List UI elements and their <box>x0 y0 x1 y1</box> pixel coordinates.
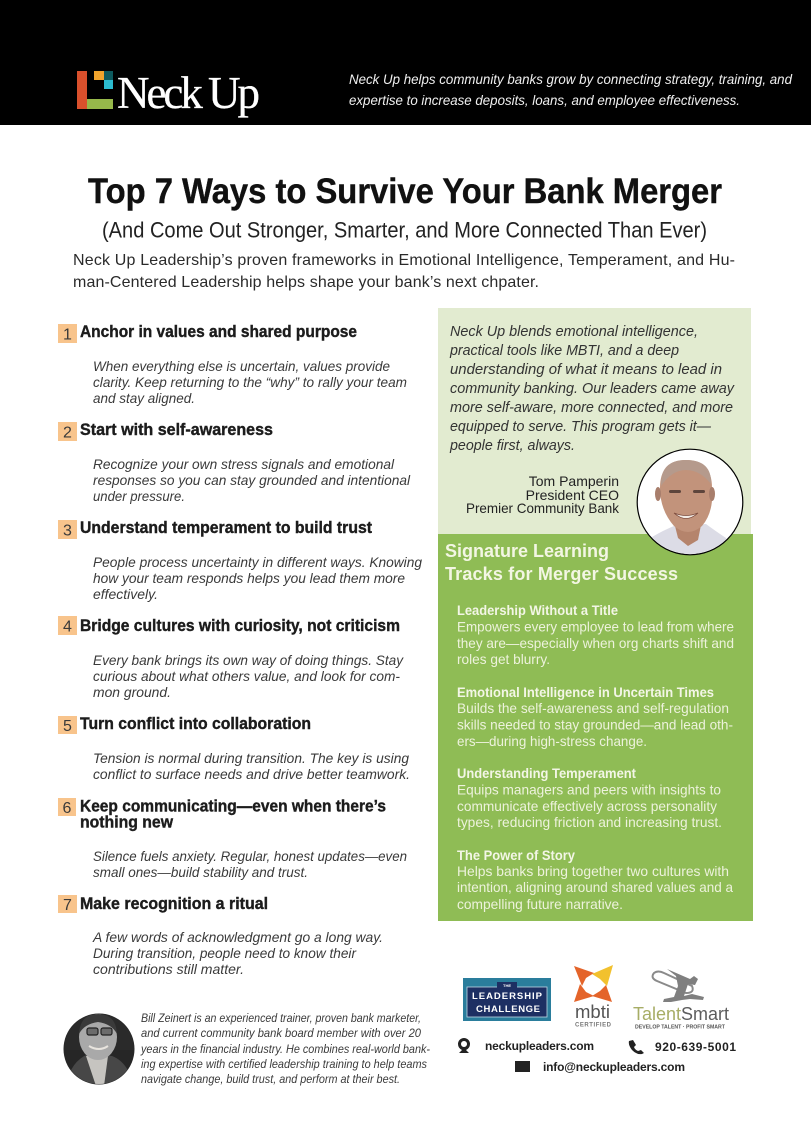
track 4 <box>457 847 733 912</box>
item 2: 2 <box>63 424 72 442</box>
quote text: more self-aware, more connected, and more <box>450 400 733 416</box>
track 4: The Power of Story <box>457 847 575 863</box>
intro text: Neck Up Leadership’s proven frameworks in Emotional Intelligence, Temperament, and Hu- <box>73 252 735 269</box>
track 3: Equips managers and peers with insights to <box>457 782 721 798</box>
item 5: Turn conflict into collaboration <box>80 714 311 733</box>
item 7: A few words of acknowledgment go a long way. <box>92 929 383 945</box>
logo: MBTI certified <box>574 965 613 1028</box>
portrait: Tom Pamperin <box>637 449 743 556</box>
item 2: responses so you can stay grounded and intentional <box>93 472 411 488</box>
track 3 <box>457 765 722 830</box>
panel: signature learning tracks <box>438 534 753 921</box>
logo: The Leadership Challenge: THE <box>503 983 511 988</box>
item 6: small ones—build stability and trust. <box>93 864 308 880</box>
quote text <box>449 324 735 454</box>
portrait: Bill Zeinert <box>64 1014 136 1086</box>
email: info@neckupleaders.com <box>543 1060 685 1074</box>
item 4: Every bank brings its own way of doing things. Stay <box>93 652 404 668</box>
logo: TalentSmart: DEVELOP TALENT · PROFIT SMART <box>635 1024 726 1030</box>
bio text: and current community bank board member with over 20 <box>141 1026 421 1040</box>
item 4: mon ground. <box>93 684 171 700</box>
bio text <box>140 1011 430 1086</box>
item 6: Keep communicating—even when there’s <box>80 796 386 816</box>
bio text: navigate change, build trust, and perform at their best. <box>141 1072 400 1086</box>
item 7 <box>58 894 383 977</box>
tracks heading <box>445 541 678 584</box>
tracks heading: Tracks for Merger Success <box>445 564 678 584</box>
item 2: Recognize your own stress signals and emotional <box>93 456 395 472</box>
track 2: ers—during high-stress change. <box>457 733 647 749</box>
header tagline <box>349 71 793 108</box>
track 1 <box>457 602 734 667</box>
item 1: clarity. Keep returning to the “why” to rally your team <box>93 374 407 390</box>
track 2: Emotional Intelligence in Uncertain Times <box>457 684 714 700</box>
track 4: compelling future narrative. <box>457 896 623 912</box>
item 7: contributions still matter. <box>93 961 244 977</box>
item 7: During transition, people need to know their <box>93 945 357 961</box>
item 5: 5 <box>63 718 72 735</box>
track 2: Builds the self-awareness and self-regulation <box>457 700 729 716</box>
quote text: practical tools like MBTI, and a deep <box>449 343 679 359</box>
item 5: conflict to surface needs and drive better teamwork. <box>93 766 410 782</box>
item 6: 6 <box>63 800 72 817</box>
item 3: People process uncertainty in different ways. Knowing <box>93 554 422 570</box>
subtitle: (And Come Out Stronger, Smarter, and More Connected Than Ever) <box>102 218 707 242</box>
item 3 <box>58 518 422 602</box>
quote text: understanding of what it means to lead in <box>450 362 722 378</box>
item 2: Start with self-awareness <box>80 420 273 439</box>
quote attribution: Premier Community Bank <box>466 500 620 516</box>
item 3: Understand temperament to build trust <box>80 518 372 537</box>
item 1: Anchor in values and shared purpose <box>80 322 357 341</box>
intro text <box>73 252 735 291</box>
phone number: 920-639-5001 <box>655 1040 736 1054</box>
header band <box>0 0 811 125</box>
tracks heading: Signature Learning <box>445 541 609 561</box>
track 3: communicate effectively across personality <box>457 798 717 814</box>
item 2: under pressure. <box>93 488 185 504</box>
item 7: Make recognition a ritual <box>80 894 268 913</box>
quote text: people first, always. <box>449 438 575 454</box>
logo: Neck Up: Neck Up <box>117 68 260 118</box>
icon: location pin <box>458 1038 470 1053</box>
logo: MBTI certified: mbti <box>575 1002 610 1022</box>
item 5: Tension is normal during transition. The key is using <box>93 750 409 766</box>
bio text: Bill Zeinert is an experienced trainer, proven bank marketer, <box>141 1011 421 1025</box>
intro text: man-Centered Leadership helps shape your bank’s next chpater. <box>73 274 539 291</box>
icon: phone <box>629 1040 644 1054</box>
track 1: they are—especially when org charts shift and <box>457 635 734 651</box>
quote text: community banking. Our leaders came away <box>450 381 735 397</box>
header tagline: Neck Up helps community banks grow by connecting strategy, training, and <box>349 71 793 87</box>
item 1 <box>58 322 407 406</box>
item 6: nothing new <box>80 812 174 832</box>
item 3: 3 <box>63 522 72 540</box>
quote text: equipped to serve. This program gets it— <box>450 419 711 435</box>
header tagline: expertise to increase deposits, loans, and employee effectiveness. <box>349 92 740 108</box>
title: Top 7 Ways to Survive Your Bank Merger <box>88 172 722 211</box>
logo: TalentSmart <box>633 969 729 1030</box>
quote text: Neck Up blends emotional intelligence, <box>450 324 698 340</box>
quote attribution <box>466 473 620 516</box>
track 1: roles get blurry. <box>457 651 550 667</box>
item 6 <box>58 796 407 880</box>
quote attribution: Tom Pamperin <box>529 473 619 489</box>
quote attribution: President CEO <box>526 487 619 503</box>
contact details <box>458 1038 736 1074</box>
track 2: skills needed to stay grounded—and lead oth- <box>457 716 733 732</box>
item 3: effectively. <box>93 586 158 602</box>
item 4: 4 <box>63 618 72 636</box>
item 7: 7 <box>63 897 72 914</box>
item 5 <box>58 714 410 782</box>
logo: MBTI certified: CERTIFIED <box>575 1022 612 1028</box>
bio text: ing expertise with certified leadership training to help teams <box>141 1057 427 1071</box>
item 1: When everything else is uncertain, values provide <box>93 358 390 374</box>
panel: testimonial <box>438 308 751 534</box>
logo: TalentSmart: TalentSmart <box>633 1004 729 1024</box>
track 3: Understanding Temperament <box>457 765 636 781</box>
item 1: 1 <box>63 326 72 344</box>
item 3: how your team responds helps you lead them more <box>93 570 405 586</box>
track 4: Helps banks bring together two cultures with <box>457 863 729 879</box>
track 3: types, reducing friction and increasing trust. <box>457 814 722 830</box>
track 1: Leadership Without a Title <box>457 602 618 618</box>
logo: The Leadership Challenge: LEADERSHIP <box>472 991 543 1002</box>
item 1: and stay aligned. <box>93 390 195 406</box>
bio text: years in the financial industry. He combines real-world bank- <box>140 1042 430 1056</box>
track 4: intention, aligning around shared values and a <box>457 879 733 895</box>
panel: seven ways list <box>58 322 422 977</box>
item 4: curious about what others value, and look for com- <box>93 668 400 684</box>
item 2 <box>58 420 411 504</box>
icon: envelope <box>515 1061 530 1072</box>
item 4: Bridge cultures with curiosity, not criticism <box>80 616 400 635</box>
website: neckupleaders.com <box>485 1039 594 1053</box>
track 2 <box>457 684 733 749</box>
logo: The Leadership Challenge <box>463 978 551 1021</box>
logo: The Leadership Challenge: CHALLENGE <box>476 1004 540 1015</box>
item 6: Silence fuels anxiety. Regular, honest updates—even <box>93 848 407 864</box>
track 1: Empowers every employee to lead from where <box>457 618 734 634</box>
item 4 <box>58 616 404 700</box>
